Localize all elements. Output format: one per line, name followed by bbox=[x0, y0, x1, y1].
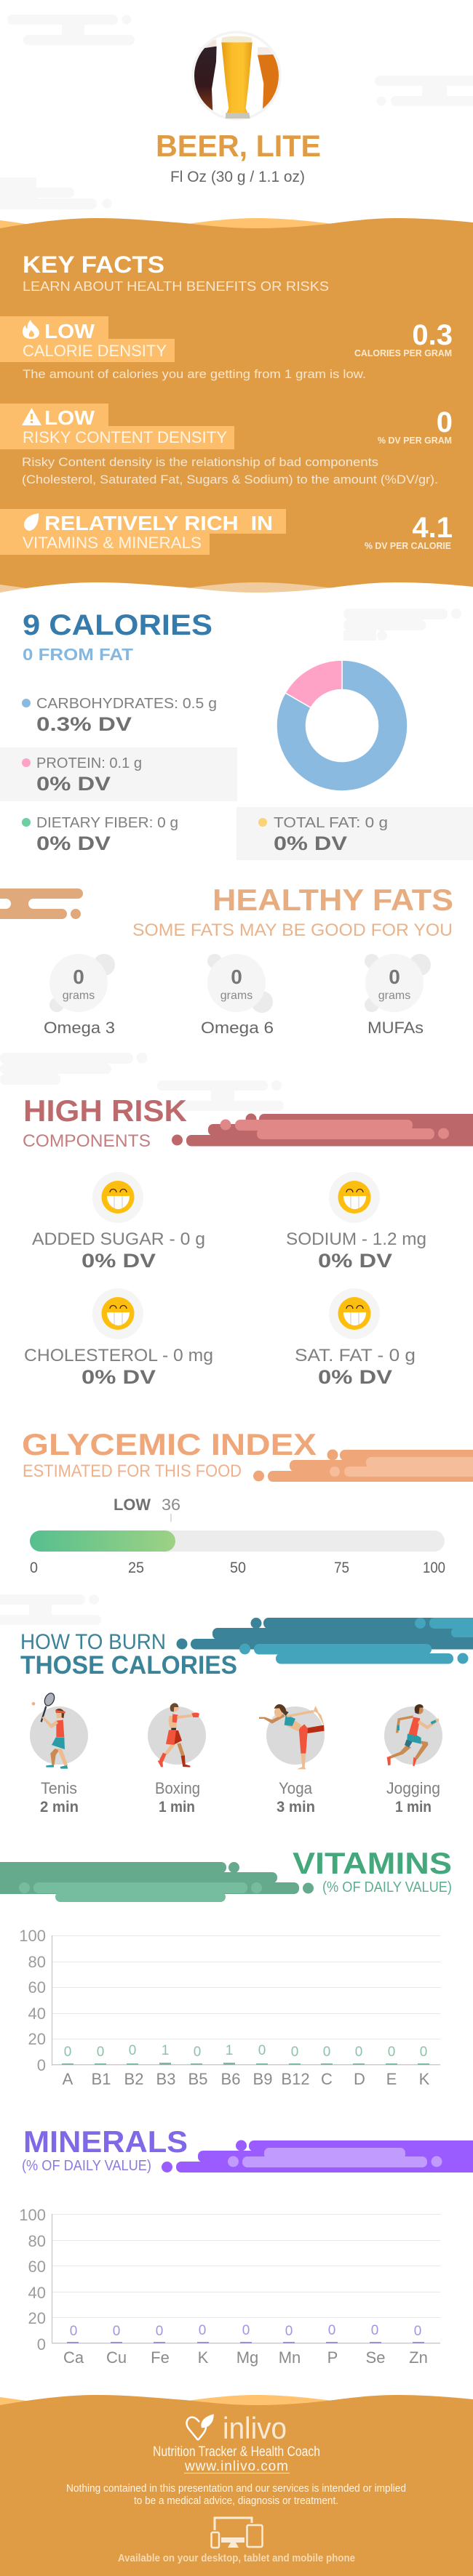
omega 6 bbox=[201, 954, 274, 1037]
decoration bar bbox=[162, 2140, 473, 2172]
gauge bbox=[30, 1496, 445, 1576]
calorie density bbox=[0, 316, 453, 381]
heading: VITAMINS bbox=[293, 1846, 452, 1880]
bar chart: vitamins: 0 bbox=[355, 2045, 362, 2060]
website: www.inlivo.com bbox=[184, 2459, 288, 2474]
gauge: 36 bbox=[162, 1496, 180, 1514]
yoga: 3 min bbox=[277, 1799, 315, 1815]
panel: high risk components bbox=[23, 1094, 473, 1388]
bar chart: minerals: 0 bbox=[199, 2323, 206, 2338]
bar chart: vitamins: 0 bbox=[64, 2045, 71, 2060]
bar chart: vitamins: 100 bbox=[19, 1927, 46, 1945]
subheading: COMPONENTS bbox=[23, 1131, 151, 1151]
bar chart: vitamins: B1 bbox=[92, 2070, 111, 2088]
decoration bar bbox=[253, 1450, 473, 1482]
food image: beer glasses bbox=[191, 31, 282, 121]
background clouds bbox=[0, 15, 473, 1625]
risky content density bbox=[0, 404, 453, 486]
donut chart bbox=[277, 660, 408, 791]
gauge: 25 bbox=[128, 1560, 144, 1576]
omega 6: 0 bbox=[231, 966, 242, 988]
bar chart: vitamins: 0 bbox=[37, 2056, 46, 2074]
heading: HOW TO BURN bbox=[20, 1630, 166, 1654]
description: (Cholesterol, Saturated Fat, Sugars & Sodium) to the amount (%DV/gr). bbox=[22, 473, 438, 486]
label: RISKY CONTENT DENSITY bbox=[23, 428, 227, 446]
dietary fiber bbox=[22, 815, 178, 854]
bar chart: minerals: Mn bbox=[279, 2348, 301, 2367]
protein: PROTEIN: 0.1 g bbox=[36, 755, 142, 771]
panel: how to burn calories bbox=[20, 1618, 473, 1815]
jogging: Jogging bbox=[386, 1779, 440, 1797]
icon: grin face bbox=[329, 1172, 380, 1223]
heading: 9 CALORIES bbox=[23, 609, 212, 641]
added sugar: ADDED SUGAR - 0 g bbox=[32, 1229, 205, 1249]
unit: % DV PER GRAM bbox=[378, 435, 452, 446]
sodium bbox=[286, 1172, 426, 1272]
sodium: 0% DV bbox=[318, 1250, 392, 1272]
subheading: LEARN ABOUT HEALTH BENEFITS OR RISKS bbox=[23, 279, 329, 294]
cholesterol: CHOLESTEROL - 0 mg bbox=[24, 1346, 213, 1365]
bar chart: vitamins: B6 bbox=[221, 2070, 240, 2088]
jogging bbox=[384, 1704, 442, 1815]
legend backgrounds bbox=[0, 747, 473, 860]
protein: 0% DV bbox=[36, 773, 111, 795]
icon: tennis player bbox=[30, 1692, 88, 1769]
gauge: 100 bbox=[423, 1560, 445, 1576]
subheading: (% OF DAILY VALUE) bbox=[22, 2158, 151, 2174]
icon: warning bbox=[22, 408, 41, 425]
omega 3: 0 bbox=[73, 966, 84, 988]
bar chart: vitamins: B5 bbox=[188, 2070, 207, 2088]
heading emphasis: THOSE CALORIES bbox=[20, 1651, 237, 1680]
logo wordmark: inlivo bbox=[223, 2411, 287, 2445]
decoration bar bbox=[0, 1862, 314, 1902]
tennis: Tenis bbox=[41, 1779, 77, 1797]
bar chart: vitamins: 60 bbox=[28, 1978, 46, 1997]
jogging: 1 min bbox=[395, 1799, 432, 1815]
bar chart: vitamins: 0 bbox=[129, 2043, 136, 2058]
gauge: 50 bbox=[230, 1560, 246, 1576]
bar chart: minerals: 0 bbox=[70, 2324, 77, 2339]
bar chart: minerals: 0 bbox=[113, 2324, 120, 2339]
omega 6: Omega 6 bbox=[201, 1019, 274, 1037]
panel: glycemic index bbox=[22, 1427, 473, 1576]
total fat: 0% DV bbox=[274, 832, 347, 854]
bar chart: minerals: Zn bbox=[409, 2348, 428, 2367]
value: 0.3 bbox=[412, 319, 453, 351]
bar chart: vitamins: 80 bbox=[28, 1953, 46, 1971]
decoration bar bbox=[176, 1618, 473, 1664]
bar chart: minerals: Fe bbox=[151, 2348, 170, 2367]
subheading: (% OF DAILY VALUE) bbox=[322, 1879, 452, 1895]
bar chart: minerals: 0 bbox=[328, 2323, 335, 2338]
yoga: Yoga bbox=[279, 1779, 313, 1797]
rating: LOW bbox=[44, 406, 95, 429]
boxing bbox=[148, 1703, 206, 1815]
bar chart: vitamins: 0 bbox=[388, 2045, 395, 2060]
bar chart: vitamins: 0 bbox=[97, 2045, 104, 2060]
bar chart: minerals: 60 bbox=[28, 2258, 46, 2276]
bar chart: vitamins bbox=[19, 1927, 440, 2088]
description bbox=[22, 456, 438, 486]
title: BEER, LITE bbox=[156, 129, 321, 163]
tennis bbox=[30, 1692, 88, 1815]
bar chart: minerals: Cu bbox=[106, 2348, 127, 2367]
dietary fiber: DIETARY FIBER: 0 g bbox=[36, 815, 178, 831]
gauge: 75 bbox=[334, 1560, 349, 1576]
carbohydrates: 0.3% DV bbox=[36, 713, 132, 735]
decoration bar bbox=[172, 1114, 473, 1146]
heading: GLYCEMIC INDEX bbox=[22, 1427, 317, 1461]
subheading: ESTIMATED FOR THIS FOOD bbox=[23, 1461, 242, 1481]
saturated fat bbox=[295, 1288, 416, 1388]
label: VITAMINS & MINERALS bbox=[23, 534, 202, 552]
panel: key facts bbox=[0, 218, 473, 604]
total fat: TOTAL FAT: 0 g bbox=[274, 815, 388, 831]
panel: healthy fats bbox=[0, 883, 453, 1037]
bar chart: minerals: Se bbox=[366, 2348, 385, 2367]
saturated fat: 0% DV bbox=[318, 1366, 392, 1388]
bar chart: vitamins: 0 bbox=[291, 2045, 298, 2060]
footer background with waves bbox=[0, 2395, 473, 2576]
bar chart: minerals: 0 bbox=[37, 2335, 46, 2354]
bar chart: vitamins: K bbox=[419, 2070, 430, 2088]
bar chart: minerals: 0 bbox=[285, 2324, 293, 2339]
carbohydrates: CARBOHYDRATES: 0.5 g bbox=[36, 696, 217, 712]
panel: calories bbox=[0, 609, 473, 860]
MUFAs: 0 bbox=[389, 966, 400, 988]
panel: footer bbox=[0, 2395, 473, 2576]
bar chart: vitamins: 1 bbox=[226, 2043, 233, 2058]
boxing: 1 min bbox=[159, 1799, 195, 1815]
bar chart: vitamins: A bbox=[63, 2070, 73, 2088]
omega 6: grams bbox=[220, 990, 253, 1002]
omega 3 bbox=[44, 954, 115, 1037]
gauge: LOW bbox=[114, 1496, 151, 1514]
icon: runner bbox=[384, 1704, 442, 1766]
cholesterol bbox=[24, 1288, 213, 1388]
bar chart: vitamins: B9 bbox=[253, 2070, 272, 2088]
bar chart: minerals: 100 bbox=[19, 2206, 46, 2224]
panel background with waves bbox=[0, 218, 473, 604]
unit: CALORIES PER GRAM bbox=[354, 348, 452, 358]
boxing: Boxing bbox=[155, 1779, 200, 1797]
decoration bar bbox=[0, 888, 83, 919]
total fat bbox=[258, 815, 388, 854]
gauge: 0 bbox=[30, 1560, 38, 1576]
bar chart: vitamins: 40 bbox=[28, 2005, 46, 2023]
tennis: 2 min bbox=[40, 1799, 79, 1815]
bar chart: minerals bbox=[19, 2206, 440, 2367]
bar chart: vitamins: 0 bbox=[258, 2043, 266, 2058]
label: CALORIE DENSITY bbox=[23, 342, 167, 360]
saturated fat: SAT. FAT - 0 g bbox=[295, 1346, 416, 1365]
MUFAs bbox=[365, 954, 431, 1037]
bar chart: minerals: 0 bbox=[371, 2323, 378, 2338]
icon: devices bbox=[211, 2518, 262, 2548]
icon: boxer bbox=[148, 1703, 206, 1768]
bar chart: minerals: P bbox=[327, 2348, 338, 2367]
availability note: Available on your desktop, tablet and mobile phone bbox=[118, 2552, 355, 2564]
added sugar bbox=[32, 1172, 205, 1272]
MUFAs: grams bbox=[378, 990, 410, 1002]
heading: HIGH RISK bbox=[23, 1094, 187, 1128]
yoga bbox=[259, 1704, 325, 1815]
bar chart: minerals: 0 bbox=[414, 2324, 421, 2339]
bar chart: minerals: 0 bbox=[156, 2324, 163, 2339]
value: 4.1 bbox=[412, 512, 453, 544]
vitamins and minerals richness bbox=[0, 509, 453, 555]
sodium: SODIUM - 1.2 mg bbox=[286, 1229, 426, 1249]
heading: HEALTHY FATS bbox=[212, 883, 453, 917]
logo icon bbox=[186, 2415, 212, 2440]
cholesterol: 0% DV bbox=[82, 1366, 156, 1388]
subheading: SOME FATS MAY BE GOOD FOR YOU bbox=[132, 920, 453, 940]
bar chart: vitamins: 0 bbox=[194, 2045, 201, 2060]
tagline: Nutrition Tracker & Health Coach bbox=[153, 2444, 320, 2460]
bar chart: minerals: 0 bbox=[242, 2323, 250, 2338]
icon: leaf bbox=[24, 513, 39, 531]
subheading: 0 FROM FAT bbox=[23, 645, 133, 664]
rating: LOW bbox=[44, 320, 95, 342]
bar chart: minerals: K bbox=[198, 2348, 209, 2367]
serving size: Fl Oz (30 g / 1.1 oz) bbox=[170, 169, 305, 185]
rating: RELATIVELY RICH IN bbox=[44, 512, 273, 534]
bar chart: vitamins: 0 bbox=[323, 2045, 330, 2060]
icon: flame bbox=[23, 320, 39, 339]
icon: grin face bbox=[329, 1288, 380, 1339]
bar chart: vitamins: E bbox=[386, 2070, 397, 2088]
heading: KEY FACTS bbox=[23, 252, 164, 278]
bar chart: vitamins: C bbox=[321, 2070, 333, 2088]
disclaimer: Nothing contained in this presentation and our services is intended or implied bbox=[66, 2482, 406, 2495]
bar chart: vitamins: D bbox=[354, 2070, 365, 2088]
disclaimer: to be a medical advice, diagnosis or treatment. bbox=[134, 2495, 338, 2507]
bar chart: minerals: 20 bbox=[28, 2309, 46, 2327]
description: The amount of calories you are getting from 1 gram is low. bbox=[23, 368, 366, 381]
dietary fiber: 0% DV bbox=[36, 832, 111, 854]
bar chart: vitamins: B12 bbox=[281, 2070, 310, 2088]
bar chart: vitamins: B2 bbox=[124, 2070, 143, 2088]
bar chart: vitamins: 0 bbox=[420, 2045, 427, 2060]
bar chart: minerals: Ca bbox=[63, 2348, 84, 2367]
panel: vitamins bbox=[0, 1846, 452, 2088]
disclaimer bbox=[66, 2482, 406, 2507]
bar chart: minerals: 40 bbox=[28, 2284, 46, 2302]
added sugar: 0% DV bbox=[82, 1250, 156, 1272]
description: Risky Content density is the relationship of bad components bbox=[22, 456, 378, 469]
heading: MINERALS bbox=[23, 2124, 188, 2159]
unit: % DV PER CALORIE bbox=[365, 540, 451, 551]
icon: yoga pose bbox=[259, 1704, 325, 1769]
value: 0 bbox=[437, 406, 453, 438]
omega 3: Omega 3 bbox=[44, 1019, 115, 1037]
bar chart: minerals: Mg bbox=[236, 2348, 258, 2367]
icon: grin face bbox=[92, 1288, 143, 1339]
bar chart: vitamins: B3 bbox=[156, 2070, 175, 2088]
carbohydrates bbox=[22, 696, 217, 735]
bar chart: vitamins: 1 bbox=[162, 2043, 169, 2058]
omega 3: grams bbox=[63, 990, 95, 1002]
icon: grin face bbox=[92, 1172, 143, 1223]
protein bbox=[22, 755, 142, 795]
bar chart: vitamins: 20 bbox=[28, 2030, 46, 2048]
bar chart: minerals: 80 bbox=[28, 2232, 46, 2250]
panel: minerals bbox=[19, 2124, 473, 2367]
MUFAs: MUFAs bbox=[367, 1019, 424, 1037]
